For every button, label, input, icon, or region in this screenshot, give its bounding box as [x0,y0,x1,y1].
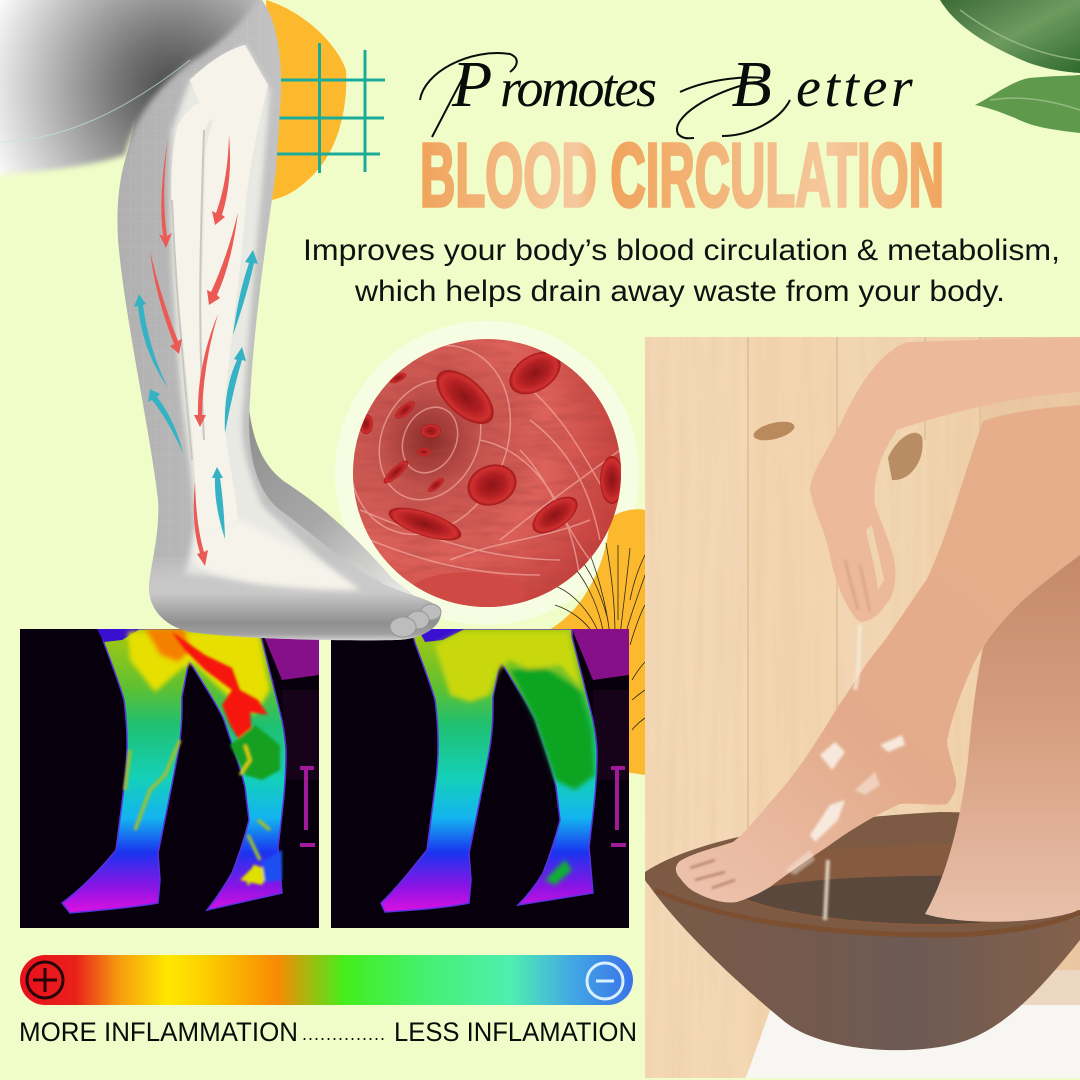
toes [390,604,441,637]
teal grid decoration [276,43,385,173]
ankle bones [195,520,360,590]
thermal scale mark [611,768,626,845]
vessel wall rings [354,345,619,576]
water drip [825,625,860,920]
red arrows [150,135,238,566]
main leg and foot [676,405,1080,903]
foot bath photo [644,337,1080,1080]
leaves top right [940,0,1080,133]
title script: Promotes Better: etter [796,57,916,119]
scale labels [19,1017,637,1047]
background glow [572,629,629,680]
hand and arm [810,337,1080,622]
tibia [190,45,268,535]
toes [690,860,735,888]
bones [171,45,360,590]
back leg [240,400,425,604]
description text: which helps drain away waste from your body. [354,275,1005,308]
bowl rim front edge [655,890,1080,935]
red blood cells [359,343,624,612]
description text: Improves your body’s blood circulation & metabolism, [303,234,1060,267]
soft tissue highlight [170,45,350,590]
scale labels: LESS INFLAMATION [394,1017,637,1047]
thigh top purple [97,629,140,642]
wood knot [754,422,794,440]
legs [381,629,597,912]
plus icon [27,962,63,998]
water [746,876,992,924]
thigh wire lines [0,60,190,142]
description text [303,234,1060,308]
wire mesh on leg [117,0,281,632]
scale labels: .............. [302,1024,385,1044]
title script: Promotes Better: romotes [500,58,656,118]
plank seams [748,337,980,828]
thigh [0,0,268,176]
bowl rim [644,812,1080,935]
scale labels: MORE INFLAMMATION [19,1017,298,1047]
wood wall planks [645,337,1080,1078]
minus icon [587,963,623,999]
title script: Promotes Better: P [451,48,492,121]
sponge [888,433,923,480]
finger gap [866,525,884,590]
bowl inner wall [743,844,996,926]
teal arrows [134,250,258,539]
back leg and foot [925,540,1080,922]
leaf line art [552,543,645,730]
thermal image: before [20,629,319,928]
towel [745,1005,1080,1080]
title script: Promotes Better: B [715,48,772,121]
bowl body [648,884,1080,1050]
bone shadow [172,130,204,460]
background glow [264,638,319,680]
blood vessel circle [353,339,621,607]
water splash on foot [785,735,905,875]
warm and green zones [435,632,595,885]
foot shading [149,555,441,640]
legs [62,629,286,913]
script swash on P [420,53,517,137]
script swash on B [677,77,790,138]
orange blob lower with leaf line art [545,509,645,775]
leg anatomy illustration [0,0,441,640]
thermal scale mark [300,768,315,845]
thermal image: after [331,629,629,928]
hot zones [128,629,270,715]
title script: Promotes Better [420,48,916,138]
thermal colour scale bar [20,955,633,1005]
halo behind blood vessel [335,321,639,625]
thigh top purple [418,629,465,642]
fibula [171,101,213,530]
front leg and foot [117,0,441,640]
finger lines [845,560,870,612]
orange blob top [266,0,346,200]
